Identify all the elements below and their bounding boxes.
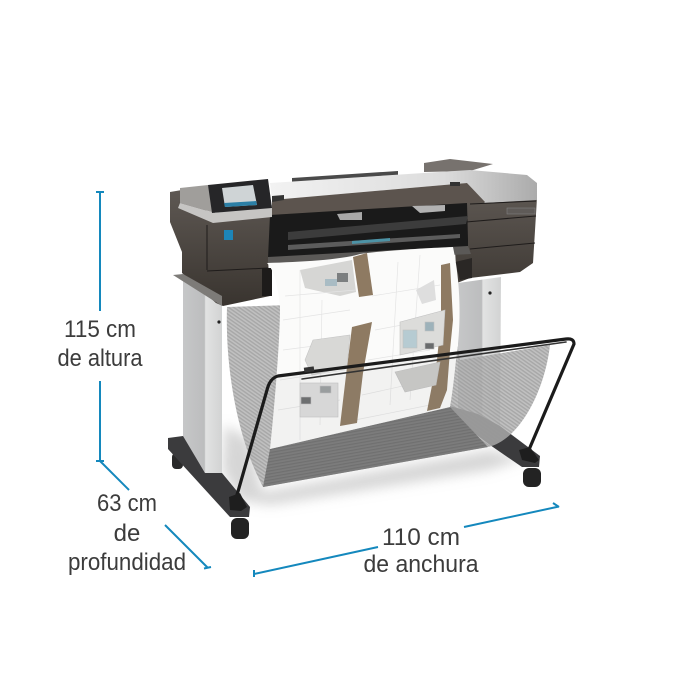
clip on frame xyxy=(304,366,314,373)
touchscreen xyxy=(222,185,257,207)
dimension arrow: height xyxy=(96,192,104,461)
label: width: de anchura xyxy=(364,551,479,578)
brown strip top left xyxy=(353,253,373,297)
label: depth: de xyxy=(114,520,140,547)
label: depth: profundidad xyxy=(68,549,186,576)
model badge xyxy=(507,208,535,214)
brown band below lid xyxy=(272,183,485,215)
left light shoulder xyxy=(180,185,215,213)
blue media strip xyxy=(352,238,390,244)
label: depth xyxy=(68,490,186,576)
right top box xyxy=(424,159,493,172)
mesh bin back xyxy=(227,300,550,487)
label: width xyxy=(364,524,479,578)
paper edge clamp left xyxy=(262,268,272,296)
plan lines xyxy=(278,255,440,440)
left front bracket xyxy=(229,493,247,511)
grey plan panel xyxy=(300,260,356,296)
printed paper xyxy=(267,247,460,449)
mesh bin floor xyxy=(263,407,488,487)
left stand column xyxy=(183,278,222,473)
printer body xyxy=(170,159,537,306)
control panel xyxy=(208,179,272,213)
label: width: 110 cm xyxy=(382,524,460,551)
right front caster xyxy=(523,468,541,487)
printer stand xyxy=(168,277,540,517)
scanner lid xyxy=(270,170,537,203)
plan sketch right upper xyxy=(416,280,436,304)
energy star label xyxy=(224,230,233,240)
left shelf lip xyxy=(173,274,222,306)
rear roll cover xyxy=(292,171,398,182)
front panel lines xyxy=(207,201,536,271)
left front caster xyxy=(231,518,249,539)
brown strip right xyxy=(427,263,453,411)
central cavity xyxy=(268,203,468,258)
right foot xyxy=(450,406,540,467)
dimension arrow: width xyxy=(254,503,559,577)
label: height: 115 cm xyxy=(64,316,136,343)
paper feed roller xyxy=(268,246,471,264)
brown strip middle xyxy=(340,322,372,426)
grey clips xyxy=(337,212,362,220)
rear caster xyxy=(172,453,183,469)
label: depth: 63 cm xyxy=(97,490,157,517)
label: height: de altura xyxy=(58,345,143,372)
floor shadow xyxy=(222,425,525,505)
plan drawing right xyxy=(395,310,445,392)
plan drawing left xyxy=(300,335,350,417)
mesh veil over paper xyxy=(270,353,458,449)
label: height xyxy=(58,316,143,372)
right stand column xyxy=(458,277,501,428)
left foot xyxy=(168,436,250,517)
black bin frame xyxy=(237,339,574,495)
dimension arrow: depth xyxy=(100,461,211,568)
right front bracket xyxy=(519,447,539,463)
main dark body xyxy=(170,190,537,306)
right roll end xyxy=(455,258,472,280)
paper sheet xyxy=(267,247,460,449)
